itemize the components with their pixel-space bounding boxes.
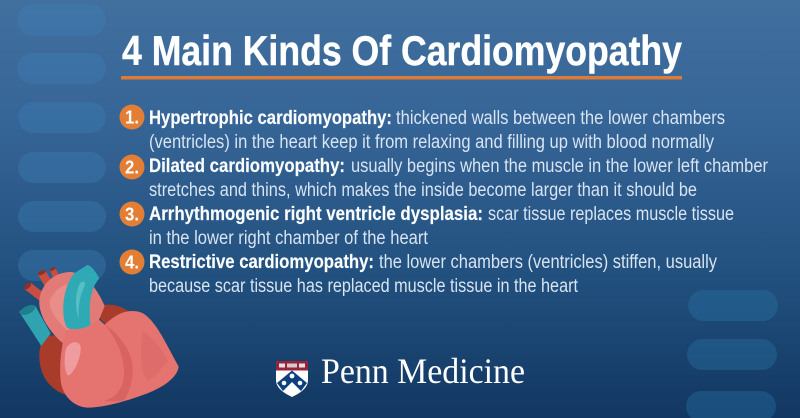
- list item 2: 2.: [125, 158, 139, 178]
- list item 2: stretches and thins, which makes the inside become larger than it should be: [149, 180, 697, 201]
- list item 4: [120, 250, 717, 297]
- list item 1: Hypertrophic cardiomyopathy:: [149, 107, 392, 129]
- logo: Penn Medicine wordmark: Penn Medicine: [321, 351, 525, 391]
- list item 4: Restrictive cardiomyopathy:: [149, 251, 374, 273]
- title underline: [121, 76, 682, 80]
- list item 3: 3.: [125, 204, 139, 224]
- list item 4: the lower chambers (ventricles) stiffen, usually: [379, 252, 717, 273]
- list item 1: thickened walls between the lower chambers: [396, 108, 725, 129]
- list item 2: [120, 154, 769, 201]
- list item 3: in the lower right chamber of the heart: [149, 228, 429, 249]
- list item 4: 4.: [125, 252, 139, 272]
- list item 1: 1.: [125, 108, 139, 128]
- list item 4: because scar tissue has replaced muscle tissue in the heart: [149, 276, 579, 297]
- list item 3: scar tissue replaces muscle tissue: [488, 204, 734, 225]
- list item 1: (ventricles) in the heart keep it from relaxing and filling up with blood normally: [149, 132, 714, 153]
- list item 3: Arrhythmogenic right ventricle dysplasia:: [149, 203, 483, 225]
- list item 3: [120, 202, 734, 249]
- logo: Penn shield: [276, 361, 308, 397]
- list item 2: Dilated cardiomyopathy:: [149, 155, 345, 177]
- list item 1: [120, 104, 725, 153]
- decorative pills: right column: [686, 290, 778, 418]
- icon: heart illustration: [19, 265, 179, 408]
- decorative pills: left column: [17, 4, 106, 281]
- title: 4 Main Kinds Of Cardiomyopathy: [122, 27, 682, 74]
